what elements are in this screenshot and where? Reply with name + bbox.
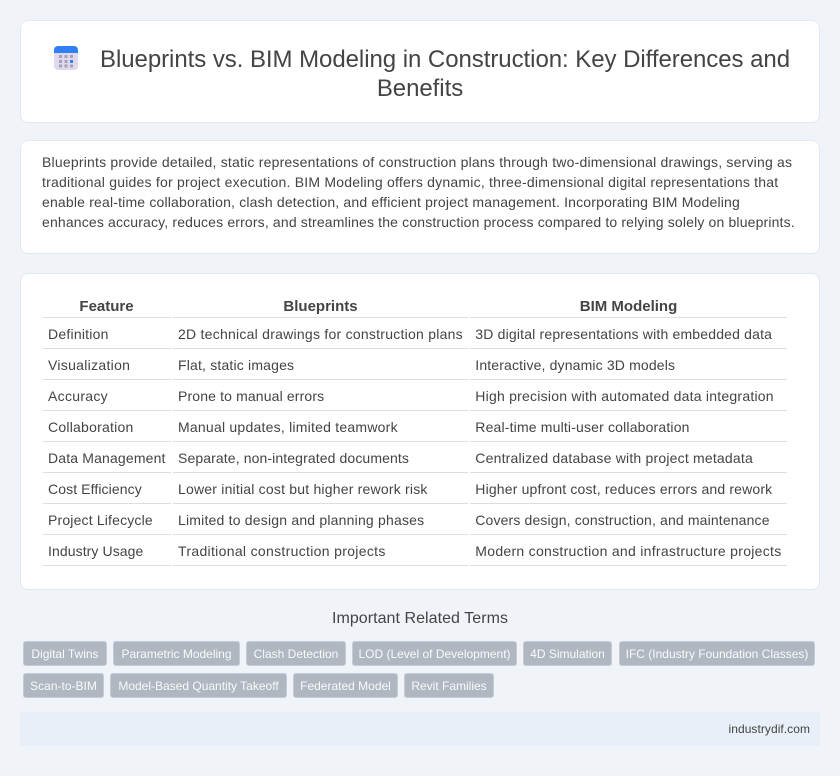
- table header row: BIM Modeling: [580, 298, 677, 315]
- row: Data Management: Centralized database with project metadata: [475, 450, 753, 466]
- row: Project Lifecycle: Limited to design and planning phases: [178, 512, 424, 528]
- row: Accuracy: Prone to manual errors: [178, 388, 324, 404]
- panel: introduction: [20, 140, 820, 254]
- row: Data Management: Separate, non-integrated documents: [178, 450, 409, 466]
- intro paragraph: traditional guides for project execution. BIM Modeling offers dynamic, three-dimensional digital representations that: [42, 174, 778, 190]
- footer source: industrydif.com: [729, 722, 810, 736]
- row: Data Management: [48, 450, 753, 466]
- row: Cost Efficiency: Higher upfront cost, reduces errors and rework: [475, 481, 772, 497]
- title: Benefits: [377, 75, 463, 102]
- row: Collaboration: Collaboration: [48, 419, 134, 435]
- table header row: Blueprints: [283, 298, 358, 315]
- row: Cost Efficiency: Lower initial cost but higher rework risk: [178, 481, 428, 497]
- table header row: [79, 298, 677, 315]
- row: Project Lifecycle: Covers design, construction, and maintenance: [475, 512, 770, 528]
- related term tags: [23, 641, 815, 698]
- footer bar: [20, 712, 820, 746]
- intro paragraph: enhances accuracy, reduces errors, and streamlines the construction process compared to relying solely on blueprints.: [42, 214, 795, 230]
- row: Data Management: Data Management: [48, 450, 166, 466]
- row: Project Lifecycle: [48, 512, 770, 528]
- intro paragraph: Blueprints provide detailed, static representations of construction plans through two-dimensional drawings, serving as: [42, 154, 792, 170]
- row: Accuracy: High precision with automated data integration: [475, 388, 774, 404]
- row: Accuracy: Accuracy: [48, 388, 108, 404]
- row: Cost Efficiency: [48, 481, 772, 497]
- row: Definition: [48, 326, 772, 342]
- related term tags: Clash Detection: [254, 647, 338, 661]
- row: Industry Usage: Industry Usage: [48, 543, 143, 559]
- row: Collaboration: Manual updates, limited teamwork: [178, 419, 398, 435]
- title: [100, 46, 790, 102]
- related term tags: Digital Twins: [31, 647, 99, 661]
- row: Visualization: Visualization: [48, 357, 130, 373]
- row: Collaboration: Real-time multi-user collaboration: [475, 419, 690, 435]
- row: Accuracy: [48, 388, 774, 404]
- intro paragraph: enable real-time collaboration, clash detection, and efficient project management. Incorporating BIM Modeling: [42, 194, 740, 210]
- related term tags: LOD (Level of Development): [358, 647, 511, 661]
- icon: calendar: [54, 46, 78, 70]
- related term tags: 4D Simulation: [530, 647, 605, 661]
- related term tags: Scan-to-BIM: [30, 679, 97, 693]
- row: Visualization: Flat, static images: [178, 357, 294, 373]
- row: Definition: Definition: [48, 326, 109, 342]
- row: Cost Efficiency: Cost Efficiency: [48, 481, 142, 497]
- header panel: [20, 20, 820, 123]
- row: Industry Usage: [48, 543, 782, 559]
- related term tags: IFC (Industry Foundation Classes): [626, 647, 808, 661]
- related term tags: Parametric Modeling: [121, 647, 232, 661]
- row: Visualization: Interactive, dynamic 3D models: [475, 357, 675, 373]
- row: Project Lifecycle: Project Lifecycle: [48, 512, 153, 528]
- intro paragraph: [42, 154, 795, 230]
- row: Industry Usage: Modern construction and infrastructure projects: [475, 543, 782, 559]
- row: Definition: 3D digital representations with embedded data: [475, 326, 772, 342]
- row: Collaboration: [48, 419, 690, 435]
- heading: related terms: Important Related Terms: [332, 610, 508, 627]
- related term tags: Model-Based Quantity Takeoff: [118, 679, 279, 693]
- related term tags: Revit Families: [411, 679, 487, 693]
- row: Industry Usage: Traditional construction projects: [178, 543, 386, 559]
- row: Visualization: [48, 357, 675, 373]
- related term tags: Federated Model: [300, 679, 391, 693]
- title: Blueprints vs. BIM Modeling in Construction: Key Differences and: [100, 46, 790, 73]
- table header row: Feature: [79, 298, 134, 315]
- panel: comparison table: [20, 273, 820, 590]
- row: Definition: 2D technical drawings for construction plans: [178, 326, 463, 342]
